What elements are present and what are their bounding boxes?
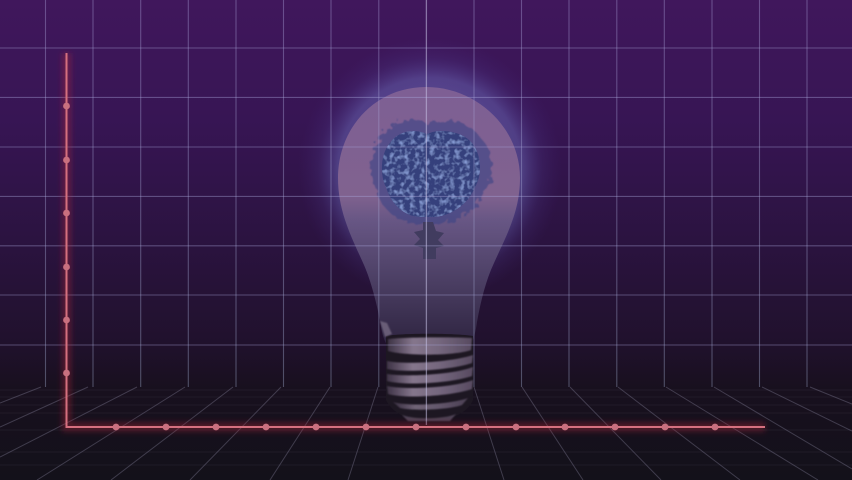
brain stem <box>414 222 444 259</box>
bulb halo <box>298 38 562 302</box>
thread bands <box>388 337 472 355</box>
floor grid <box>0 387 852 480</box>
glass neck highlight <box>380 321 392 337</box>
bulb glass <box>338 87 520 345</box>
axes lines <box>66 53 765 427</box>
lamp socket <box>380 321 473 421</box>
socket body <box>386 334 473 421</box>
x axis points <box>113 424 718 430</box>
brain fragments edge <box>371 120 492 224</box>
y axis points <box>63 103 70 376</box>
brain core <box>382 131 480 217</box>
light bulb <box>298 38 562 421</box>
brain <box>371 120 492 259</box>
axes glow <box>66 53 765 427</box>
chart axes <box>63 53 765 430</box>
